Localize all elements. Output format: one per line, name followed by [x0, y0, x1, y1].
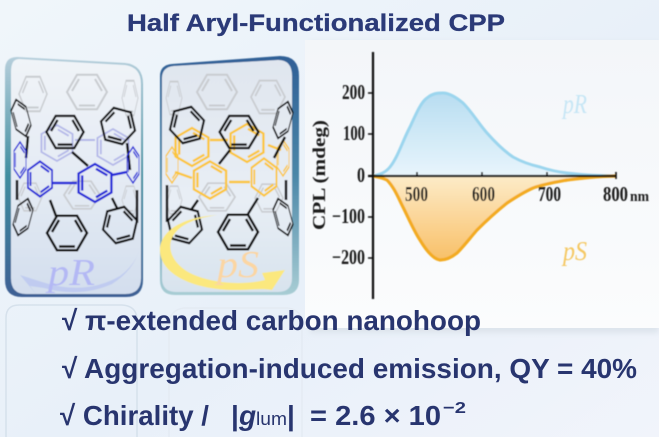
- panel: pR molecule card: [5, 57, 143, 297]
- y axis labels: 200: [342, 80, 365, 104]
- feature: g-lum value: [231, 400, 466, 431]
- y axis labels: 100: [343, 121, 365, 145]
- x axis labels: 500: [405, 182, 428, 206]
- blue rings: [14, 142, 139, 202]
- y axis labels: −200: [332, 245, 365, 269]
- chart: CPL spectrum: [309, 52, 649, 299]
- feature: nanohoop: √ π-extended carbon nanohoop: [62, 305, 481, 336]
- axes: [368, 52, 616, 299]
- black phenyl substituents: [9, 98, 141, 250]
- x axis labels: nm: [630, 189, 649, 205]
- feature: g-lum value: = 2.6 × 10: [310, 400, 441, 431]
- x axis labels: 800: [603, 182, 628, 206]
- panel: chart background: [305, 40, 659, 333]
- x axis labels: 600: [472, 182, 495, 206]
- y axis labels: 0: [357, 163, 365, 187]
- black phenyl substituents: [164, 100, 295, 249]
- back rings: [166, 75, 285, 214]
- back rings: [18, 75, 138, 214]
- series label: pR: pR: [561, 89, 587, 119]
- x axis labels: [405, 182, 649, 206]
- feature: g-lum value: −2: [443, 400, 466, 417]
- label: pS: pS: [214, 244, 259, 286]
- pS curve fill: [373, 176, 616, 260]
- feature: g-lum value: |: [287, 400, 295, 431]
- feature: emission: √ Aggregation-induced emission, QY = 40%: [62, 353, 637, 384]
- x axis labels: 700: [538, 182, 561, 206]
- feature: g-lum value: lum: [256, 409, 287, 429]
- label: pR: pR: [45, 252, 95, 294]
- feature: g-lum value: |: [231, 400, 239, 431]
- y axis labels: −100: [332, 204, 365, 228]
- text block: key features: [60, 305, 637, 431]
- arrow: pR rotation: [20, 248, 140, 294]
- pR curve fill: [373, 93, 616, 176]
- pS curve line: [373, 176, 616, 260]
- yellow rings: [166, 124, 289, 199]
- feature: g-lum value: g: [238, 400, 256, 431]
- arrow: pS rotation: [160, 215, 285, 290]
- series label: pS: pS: [561, 236, 587, 266]
- reflection: faded card outlines: [6, 305, 302, 437]
- card frame: [5, 57, 143, 297]
- feature: chirality: √ Chirality /: [60, 400, 209, 431]
- panel: pS molecule card: [160, 56, 299, 295]
- y axis labels: [332, 80, 365, 269]
- y axis title: CPL (mdeg): [309, 120, 330, 230]
- faded blue rings: [41, 125, 129, 165]
- pR curve line: [373, 93, 616, 176]
- card frame: [160, 56, 299, 295]
- title: Half Aryl-Functionalized CPP: [127, 10, 505, 37]
